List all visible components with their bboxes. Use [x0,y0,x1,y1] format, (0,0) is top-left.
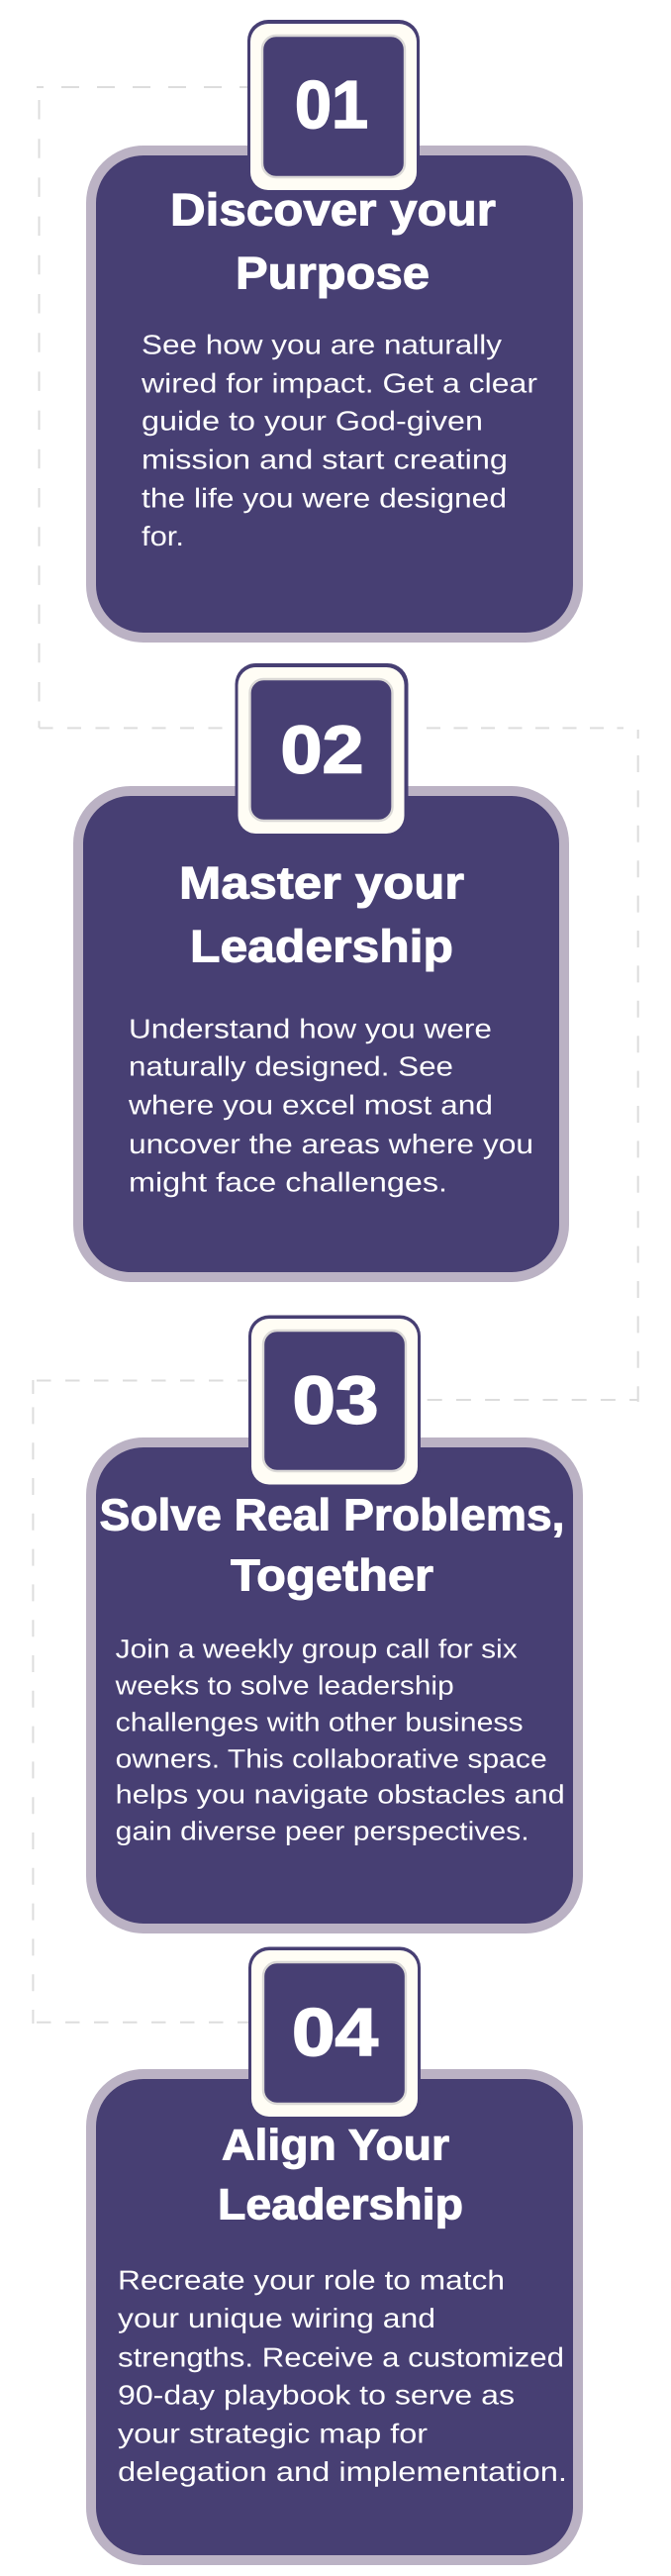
body text: weeks to solve leadership [115,1671,454,1701]
panel: step 1 [91,20,578,638]
heading: Purpose [236,248,430,299]
body text: your unique wiring and [118,2303,435,2333]
body text [128,1013,533,1197]
body text: Understand how you were [129,1013,492,1043]
body text: challenges with other business [116,1708,524,1737]
heading [170,183,496,299]
body text: for. [142,521,184,551]
panel: step 2 [78,663,564,1277]
body text [141,329,537,551]
body text [118,2264,567,2487]
heading: Solve Real Problems, [99,1490,564,1540]
number badge 03: 03 [293,1362,378,1437]
body text: naturally designed. See [129,1051,453,1082]
card background [91,2074,578,2560]
heading [99,1490,564,1601]
body text: Recreate your role to match [118,2264,505,2295]
panel: step 4 [91,1946,578,2560]
body text: where you excel most and [128,1090,493,1121]
number badge 03 [248,1315,421,1489]
heading: Together [231,1550,433,1601]
heading: Master your [179,857,464,909]
body text: strengths. Receive a customized [118,2341,564,2372]
number badge 02 [236,663,408,837]
number badge 02: 02 [281,713,364,788]
number badge 01 [247,20,420,193]
body text: 90-day playbook to serve as [118,2379,515,2410]
body text: helps you navigate obstacles and [116,1780,565,1810]
body text [115,1635,565,1846]
heading: Leadership [218,2181,463,2229]
body text: your strategic map for [118,2418,428,2448]
dashed connector: step 3 to step 4 [33,1380,248,2024]
heading: Align Your [222,2122,449,2170]
heading: Discover your [170,183,496,235]
number badge 04: 04 [292,1995,378,2070]
body text: mission and start creating [142,444,508,474]
card background [91,150,578,638]
dashed connector: step 1 to step 2 [37,87,623,728]
body text: See how you are naturally [142,329,502,359]
panel: step 3 [91,1315,578,1929]
card background [78,791,564,1277]
body text: the life you were designed [142,482,507,513]
body text: uncover the areas where you [129,1129,533,1159]
heading [179,857,464,972]
heading [218,2122,463,2229]
body text: wired for impact. Get a clear [141,367,537,398]
body text: gain diverse peer perspectives. [116,1817,529,1846]
number badge 04 [248,1946,421,2121]
card background [91,1442,578,1929]
body text: might face challenges. [129,1166,447,1197]
body text: Join a weekly group call for six [116,1635,518,1664]
number badge 01: 01 [295,67,368,143]
body text: owners. This collaborative space [116,1744,547,1774]
body text: guide to your God-given [142,406,483,437]
dashed connector: step 2 to step 3 [428,730,638,1402]
body text: delegation and implementation. [118,2456,567,2487]
heading: Leadership [190,921,453,972]
